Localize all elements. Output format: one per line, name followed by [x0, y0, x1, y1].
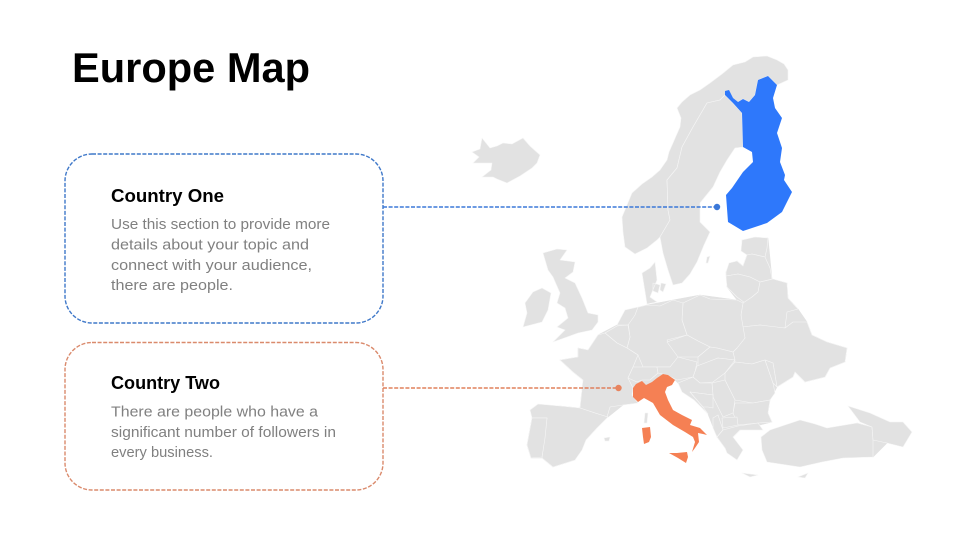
Estonia: [741, 237, 768, 257]
Turkey: [761, 420, 873, 467]
body text: There are people who have a: [111, 404, 319, 420]
Belarus: [741, 279, 798, 328]
body text: [111, 216, 330, 294]
Netherlands: [617, 307, 638, 325]
Belgium: [605, 325, 630, 348]
body text: significant number of followers in: [111, 424, 336, 441]
Lithuania: [726, 274, 760, 303]
United Kingdom: [543, 249, 598, 342]
North Macedonia: [722, 417, 738, 428]
Germany: [627, 300, 687, 367]
Denmark: [642, 262, 666, 304]
heading: Country Two: [111, 372, 220, 393]
body text: every business.: [111, 444, 213, 461]
body text: connect with your audience,: [111, 257, 312, 274]
Greece: [717, 423, 763, 460]
Corsica: [644, 413, 648, 423]
Bosnia: [690, 392, 713, 408]
panel: Country Two: [65, 342, 383, 490]
Albania: [713, 415, 723, 437]
Romania: [725, 360, 775, 403]
continental landmass backing: [527, 238, 887, 467]
connector: Country One to Finland: [383, 204, 720, 210]
Serbia: [712, 380, 735, 417]
Iceland: [472, 138, 540, 183]
body text: details about your topic and: [111, 236, 309, 254]
grey countries: [472, 56, 912, 478]
Sweden: [660, 95, 743, 285]
Norway: [622, 56, 788, 254]
map of Europe: [472, 56, 912, 478]
Bulgaria: [733, 400, 772, 425]
Ireland: [523, 288, 551, 327]
body text: there are people.: [111, 277, 233, 294]
Latvia: [726, 254, 772, 282]
Switzerland: [628, 367, 658, 382]
heading: Country One: [111, 185, 224, 206]
Sardinia: [642, 427, 651, 444]
title: Europe Map: [72, 44, 310, 91]
card outline: [65, 342, 383, 490]
Italian mainland: [633, 374, 707, 452]
card outline: [65, 154, 383, 323]
Croatia: [678, 377, 713, 414]
Czechia: [667, 335, 710, 357]
Caucasus: [848, 406, 912, 447]
Austria: [657, 357, 697, 380]
Portugal: [527, 418, 547, 458]
Italy highlighted: [633, 374, 707, 463]
Sicily: [669, 452, 688, 463]
France: [560, 333, 638, 417]
body text: Use this section to provide more: [111, 216, 330, 233]
Poland: [682, 295, 745, 352]
Ukraine: [733, 322, 847, 387]
Spain: [530, 404, 608, 467]
Moldova: [765, 360, 777, 387]
Mediterranean islands: [604, 256, 808, 478]
Slovakia: [698, 347, 735, 366]
Finland highlighted: [725, 76, 792, 231]
panel: Country One: [65, 154, 383, 323]
body text: [111, 404, 336, 461]
connector: Country Two to Italy: [383, 385, 622, 391]
Hungary: [693, 358, 735, 383]
